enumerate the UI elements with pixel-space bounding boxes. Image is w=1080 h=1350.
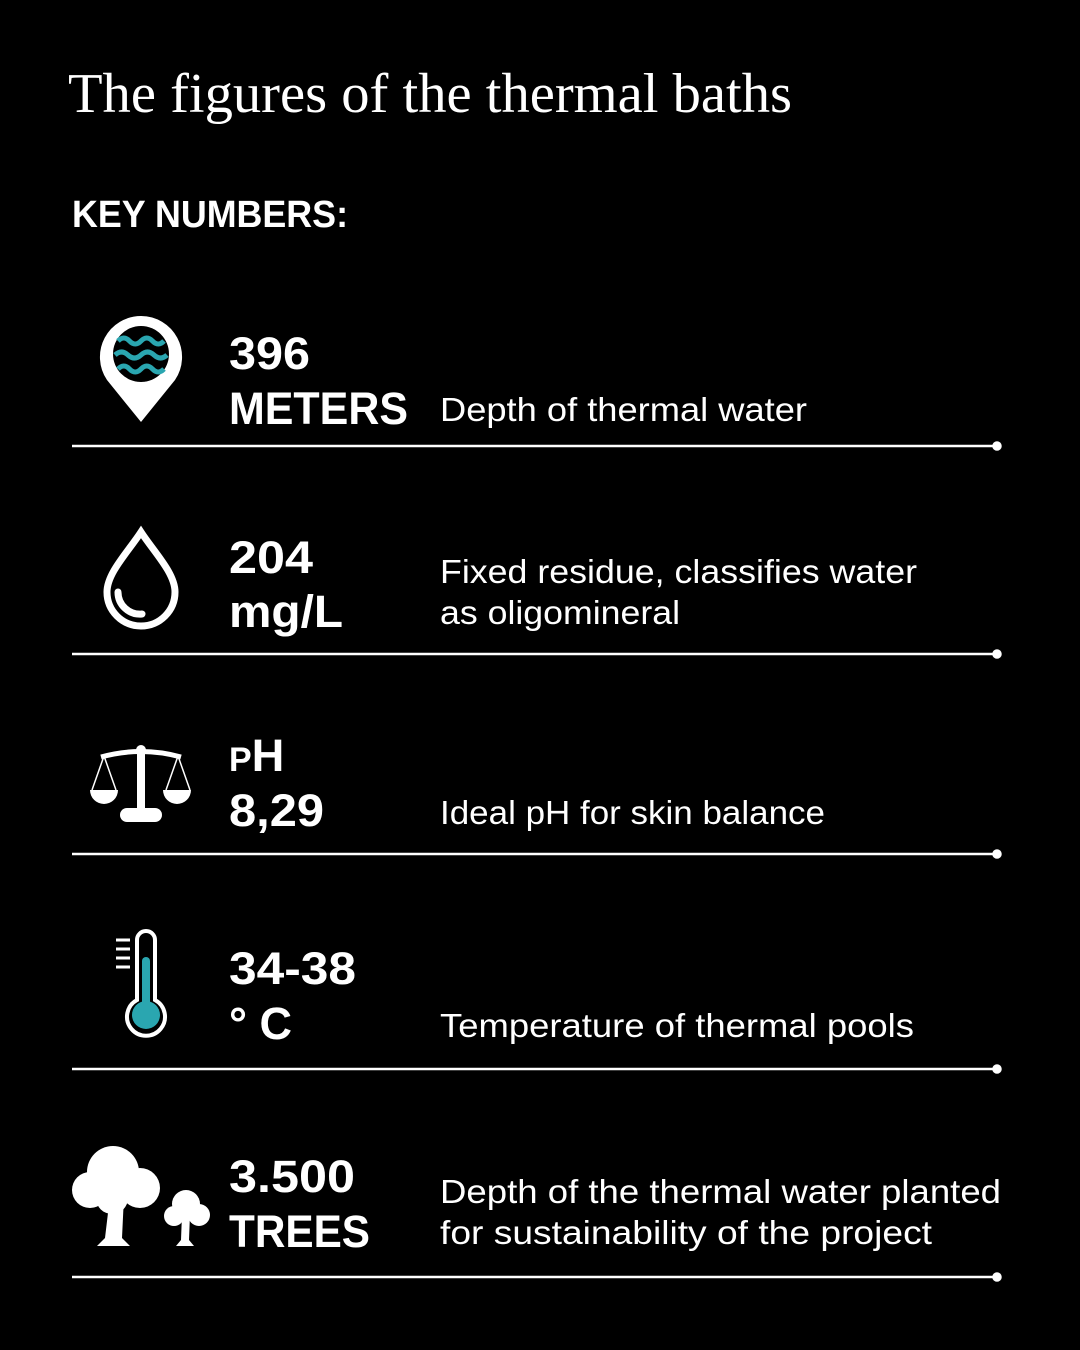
row: depth: [100, 316, 807, 434]
row: pH: [90, 730, 825, 836]
description: Temperature of thermal pools: [440, 1007, 914, 1044]
description: Fixed residue, classifies water: [440, 553, 917, 590]
value: 34-38: [229, 943, 356, 994]
description: Ideal pH for skin balance: [440, 794, 825, 831]
icon: location pin with waves: [100, 316, 182, 422]
description: Depth of thermal water: [440, 391, 807, 428]
row: fixed residue: as oligomineral: [440, 594, 680, 631]
value: 396: [229, 328, 310, 379]
row: fixed residue: [107, 532, 917, 637]
row: temperature: ° C: [229, 998, 292, 1049]
description: Depth of the thermal water planted: [440, 1173, 1001, 1210]
row: trees: for sustainability of the project: [440, 1214, 932, 1251]
value: 204: [229, 532, 313, 583]
icon: water drop: [107, 532, 175, 626]
value: PH: [229, 730, 284, 781]
row: trees: [72, 1146, 1001, 1257]
row: pH: 8,29: [229, 785, 324, 836]
row: temperature: [116, 931, 914, 1049]
heading: key numbers: KEY NUMBERS:: [72, 194, 348, 236]
icon: trees: [72, 1146, 210, 1246]
row: depth: METERS: [229, 383, 408, 434]
value: 3.500: [229, 1151, 355, 1202]
icon: scales: [90, 745, 191, 822]
title: The figures of the thermal baths: [68, 63, 792, 125]
row: fixed residue: mg/L: [229, 586, 343, 637]
icon: thermometer: [116, 931, 165, 1036]
row: trees: TREES: [229, 1206, 370, 1257]
